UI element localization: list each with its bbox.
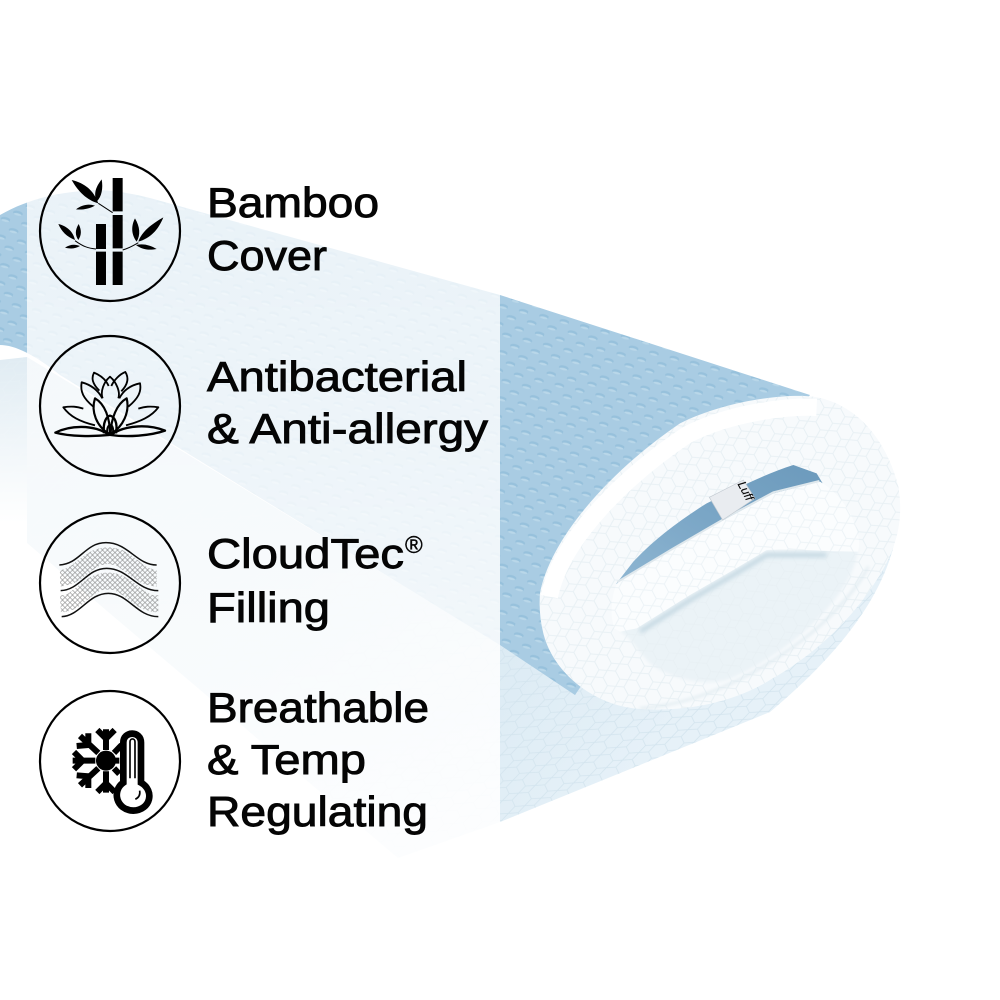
label: CloudTec Filling: Filling: [207, 584, 330, 631]
icon: lotus: [40, 336, 180, 476]
zipper: [617, 481, 819, 582]
label: Antibacterial & Anti-allergy: Antibacterial: [207, 353, 467, 400]
outer fabric shell: [540, 396, 900, 710]
translucent white text panel: [27, 0, 500, 1000]
icon: filling layers: [40, 513, 180, 653]
feature: bamboo cover: [40, 161, 379, 301]
label: Antibacterial & Anti-allergy: & Anti-allergy: [207, 405, 488, 452]
blue cover top surface: [0, 190, 810, 695]
label: Breathable & Temp Regulating: & Temp: [207, 736, 366, 783]
fabric label: Luff: [735, 479, 757, 505]
label: Bamboo Cover: [207, 179, 379, 279]
inner lower lobe: [620, 548, 858, 682]
shadow under flap: [640, 555, 827, 632]
label: CloudTec Filling: ®: [405, 532, 423, 559]
feature: CloudTec filling: [40, 513, 423, 653]
fold band crease: [640, 567, 868, 708]
label: Breathable & Temp Regulating: Breathable: [207, 684, 429, 731]
lower mattress layer: [0, 355, 895, 858]
feature: antibacterial: [40, 336, 488, 476]
rolled end: [540, 396, 900, 710]
label: Breathable & Temp Regulating: Regulating: [207, 788, 428, 835]
icon: bamboo: [40, 161, 180, 301]
label: CloudTec Filling: CloudTec: [207, 530, 404, 577]
feature: breathable: [40, 684, 429, 835]
icon: snowflake and thermometer: [40, 691, 180, 831]
label: Breathable & Temp Regulating: [207, 684, 429, 835]
inner folded flap: [612, 482, 859, 632]
smooth white rim: [549, 407, 817, 597]
label: Bamboo Cover: Cover: [207, 232, 327, 279]
label: Antibacterial & Anti-allergy: [207, 353, 488, 452]
blue gap inside roll: [616, 465, 823, 584]
mattress topper photo illustration: [0, 190, 900, 858]
label: Bamboo Cover: Bamboo: [207, 179, 379, 226]
fabric label: [709, 479, 757, 520]
label: CloudTec Filling: [207, 530, 423, 631]
